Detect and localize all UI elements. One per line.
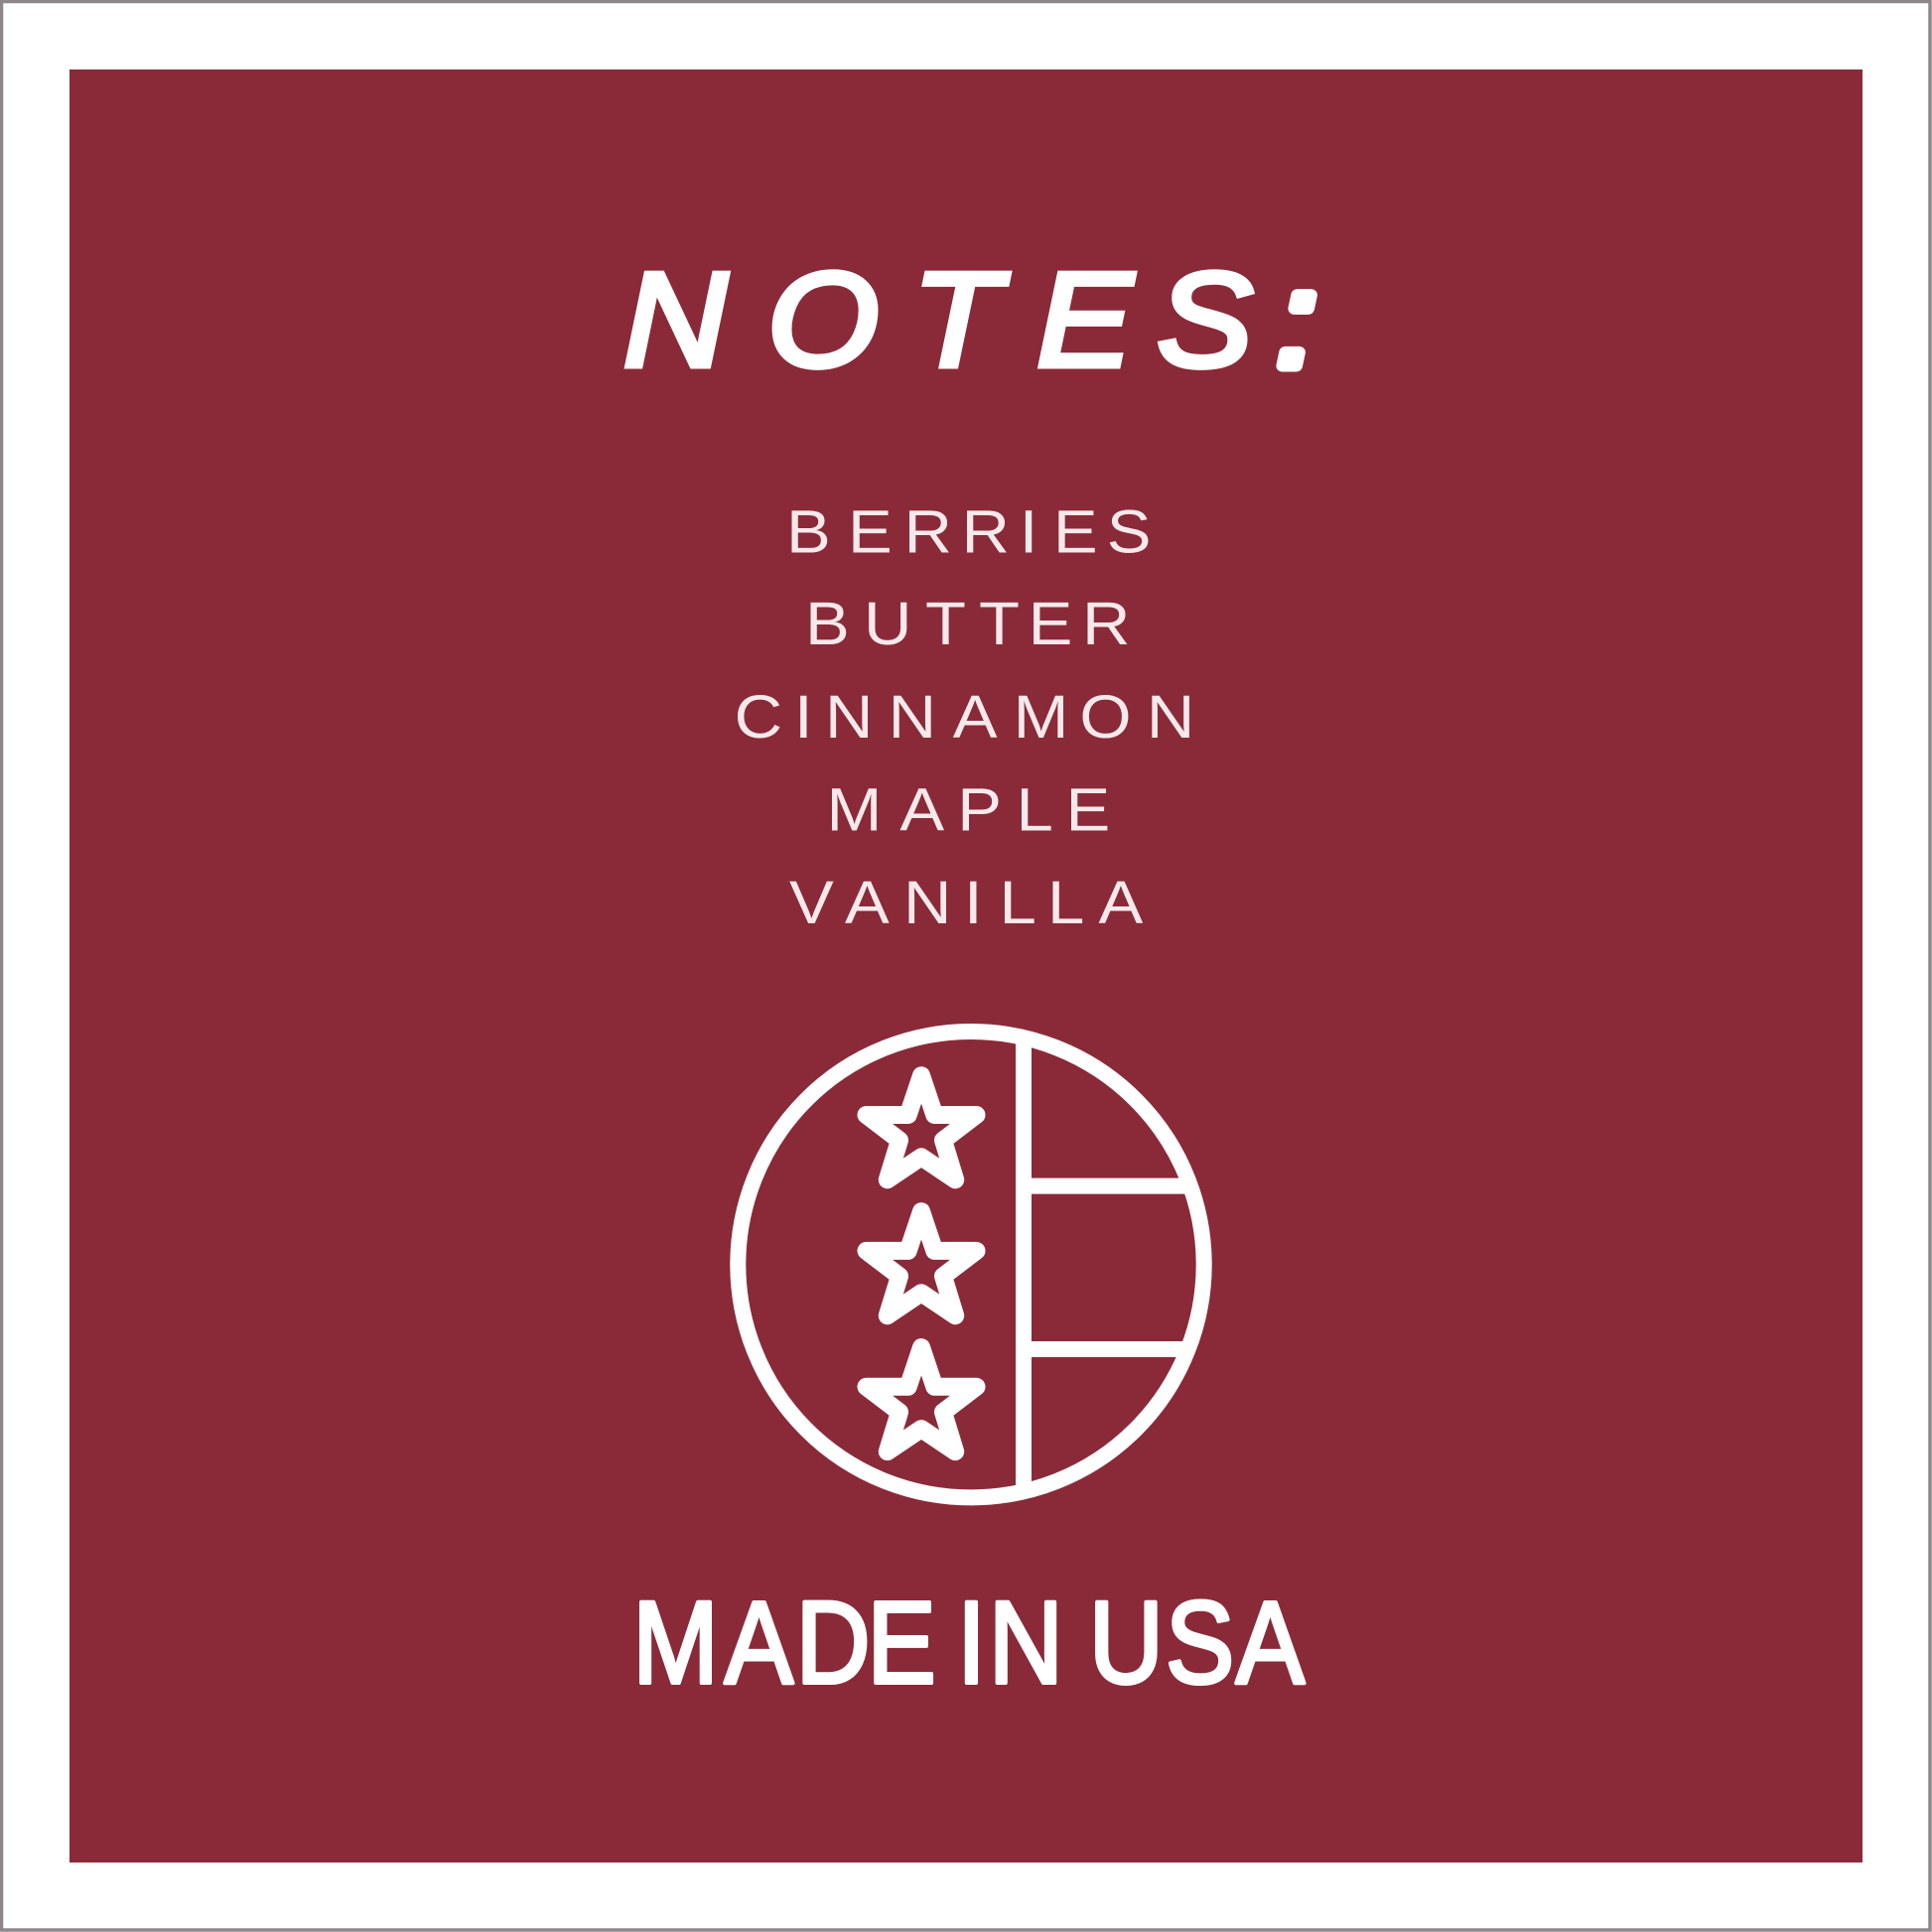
- icon ring: [738, 1032, 1204, 1497]
- note: berries: BERRIES: [786, 497, 1151, 566]
- note: vanilla: VANILLA: [789, 869, 1143, 936]
- star middle: [866, 1211, 977, 1315]
- star bottom: [866, 1347, 977, 1451]
- note: butter: BUTTER: [805, 590, 1130, 657]
- heading: notes: NOTES:: [623, 244, 1316, 394]
- text block: notes list: [735, 497, 1194, 936]
- icon: american flag circle: [738, 1032, 1204, 1497]
- flag vertical bar: [1016, 1035, 1032, 1494]
- flag upper stripe: [1024, 1178, 1189, 1194]
- made in usa label: MADE IN USA: [632, 1577, 1305, 1708]
- note: cinnamon: CINNAMON: [735, 683, 1194, 751]
- note: maple: MAPLE: [826, 775, 1110, 844]
- star top: [866, 1075, 977, 1179]
- icon: stars: [866, 1075, 977, 1451]
- flag lower stripe: [1024, 1341, 1189, 1357]
